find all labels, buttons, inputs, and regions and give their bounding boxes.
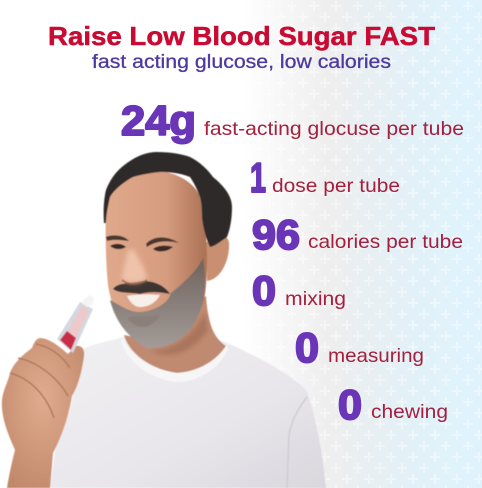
subtitle: fast acting glucose, low calories bbox=[92, 52, 391, 73]
glucose tube bbox=[57, 295, 94, 353]
stat: 0 measuring: measuring bbox=[328, 345, 424, 367]
stat: 1 dose bbox=[250, 154, 400, 201]
title: Raise Low Blood Sugar FAST bbox=[48, 21, 435, 51]
hair bbox=[104, 152, 232, 247]
neck shadow under beard bbox=[150, 312, 208, 355]
ear bbox=[206, 235, 229, 281]
stat: 96 calories bbox=[252, 211, 463, 258]
finger lines bbox=[10, 344, 70, 418]
hand bbox=[2, 338, 84, 488]
stat: 1 dose: dose per tube bbox=[272, 175, 400, 197]
stat: 0 mixing: mixing bbox=[285, 288, 346, 310]
stat: 0 measuring: 0 bbox=[295, 324, 319, 371]
stat: 0 chewing: chewing bbox=[371, 401, 448, 423]
stat: 24g fast-acting glucose: 24g bbox=[121, 97, 196, 144]
face bbox=[106, 170, 207, 348]
neck bbox=[124, 296, 226, 373]
stat: 0 chewing bbox=[338, 381, 448, 428]
stat: 24g fast-acting glucose: fast-acting glocuse per tube bbox=[204, 118, 464, 140]
man photo illustration bbox=[2, 152, 326, 488]
stat: 0 chewing: 0 bbox=[338, 381, 362, 428]
eyes and brows bbox=[106, 235, 179, 251]
moustache bbox=[113, 281, 170, 294]
stat: 0 mixing bbox=[252, 267, 346, 314]
beard bbox=[110, 258, 205, 348]
stat: 1 dose: 1 bbox=[250, 154, 266, 201]
stat: 0 measuring bbox=[295, 324, 424, 371]
stat: 96 calories: 96 bbox=[252, 211, 300, 258]
stat: 96 calories: calories per tube bbox=[308, 231, 463, 253]
chin patch bbox=[127, 316, 160, 327]
nose bbox=[122, 250, 147, 283]
sleeve seam bbox=[287, 397, 307, 488]
smile bbox=[127, 294, 160, 307]
stat: 24g fast-acting glucose bbox=[121, 97, 464, 144]
shirt bbox=[50, 334, 326, 488]
stat: 0 mixing: 0 bbox=[252, 267, 276, 314]
collar bbox=[121, 338, 228, 382]
